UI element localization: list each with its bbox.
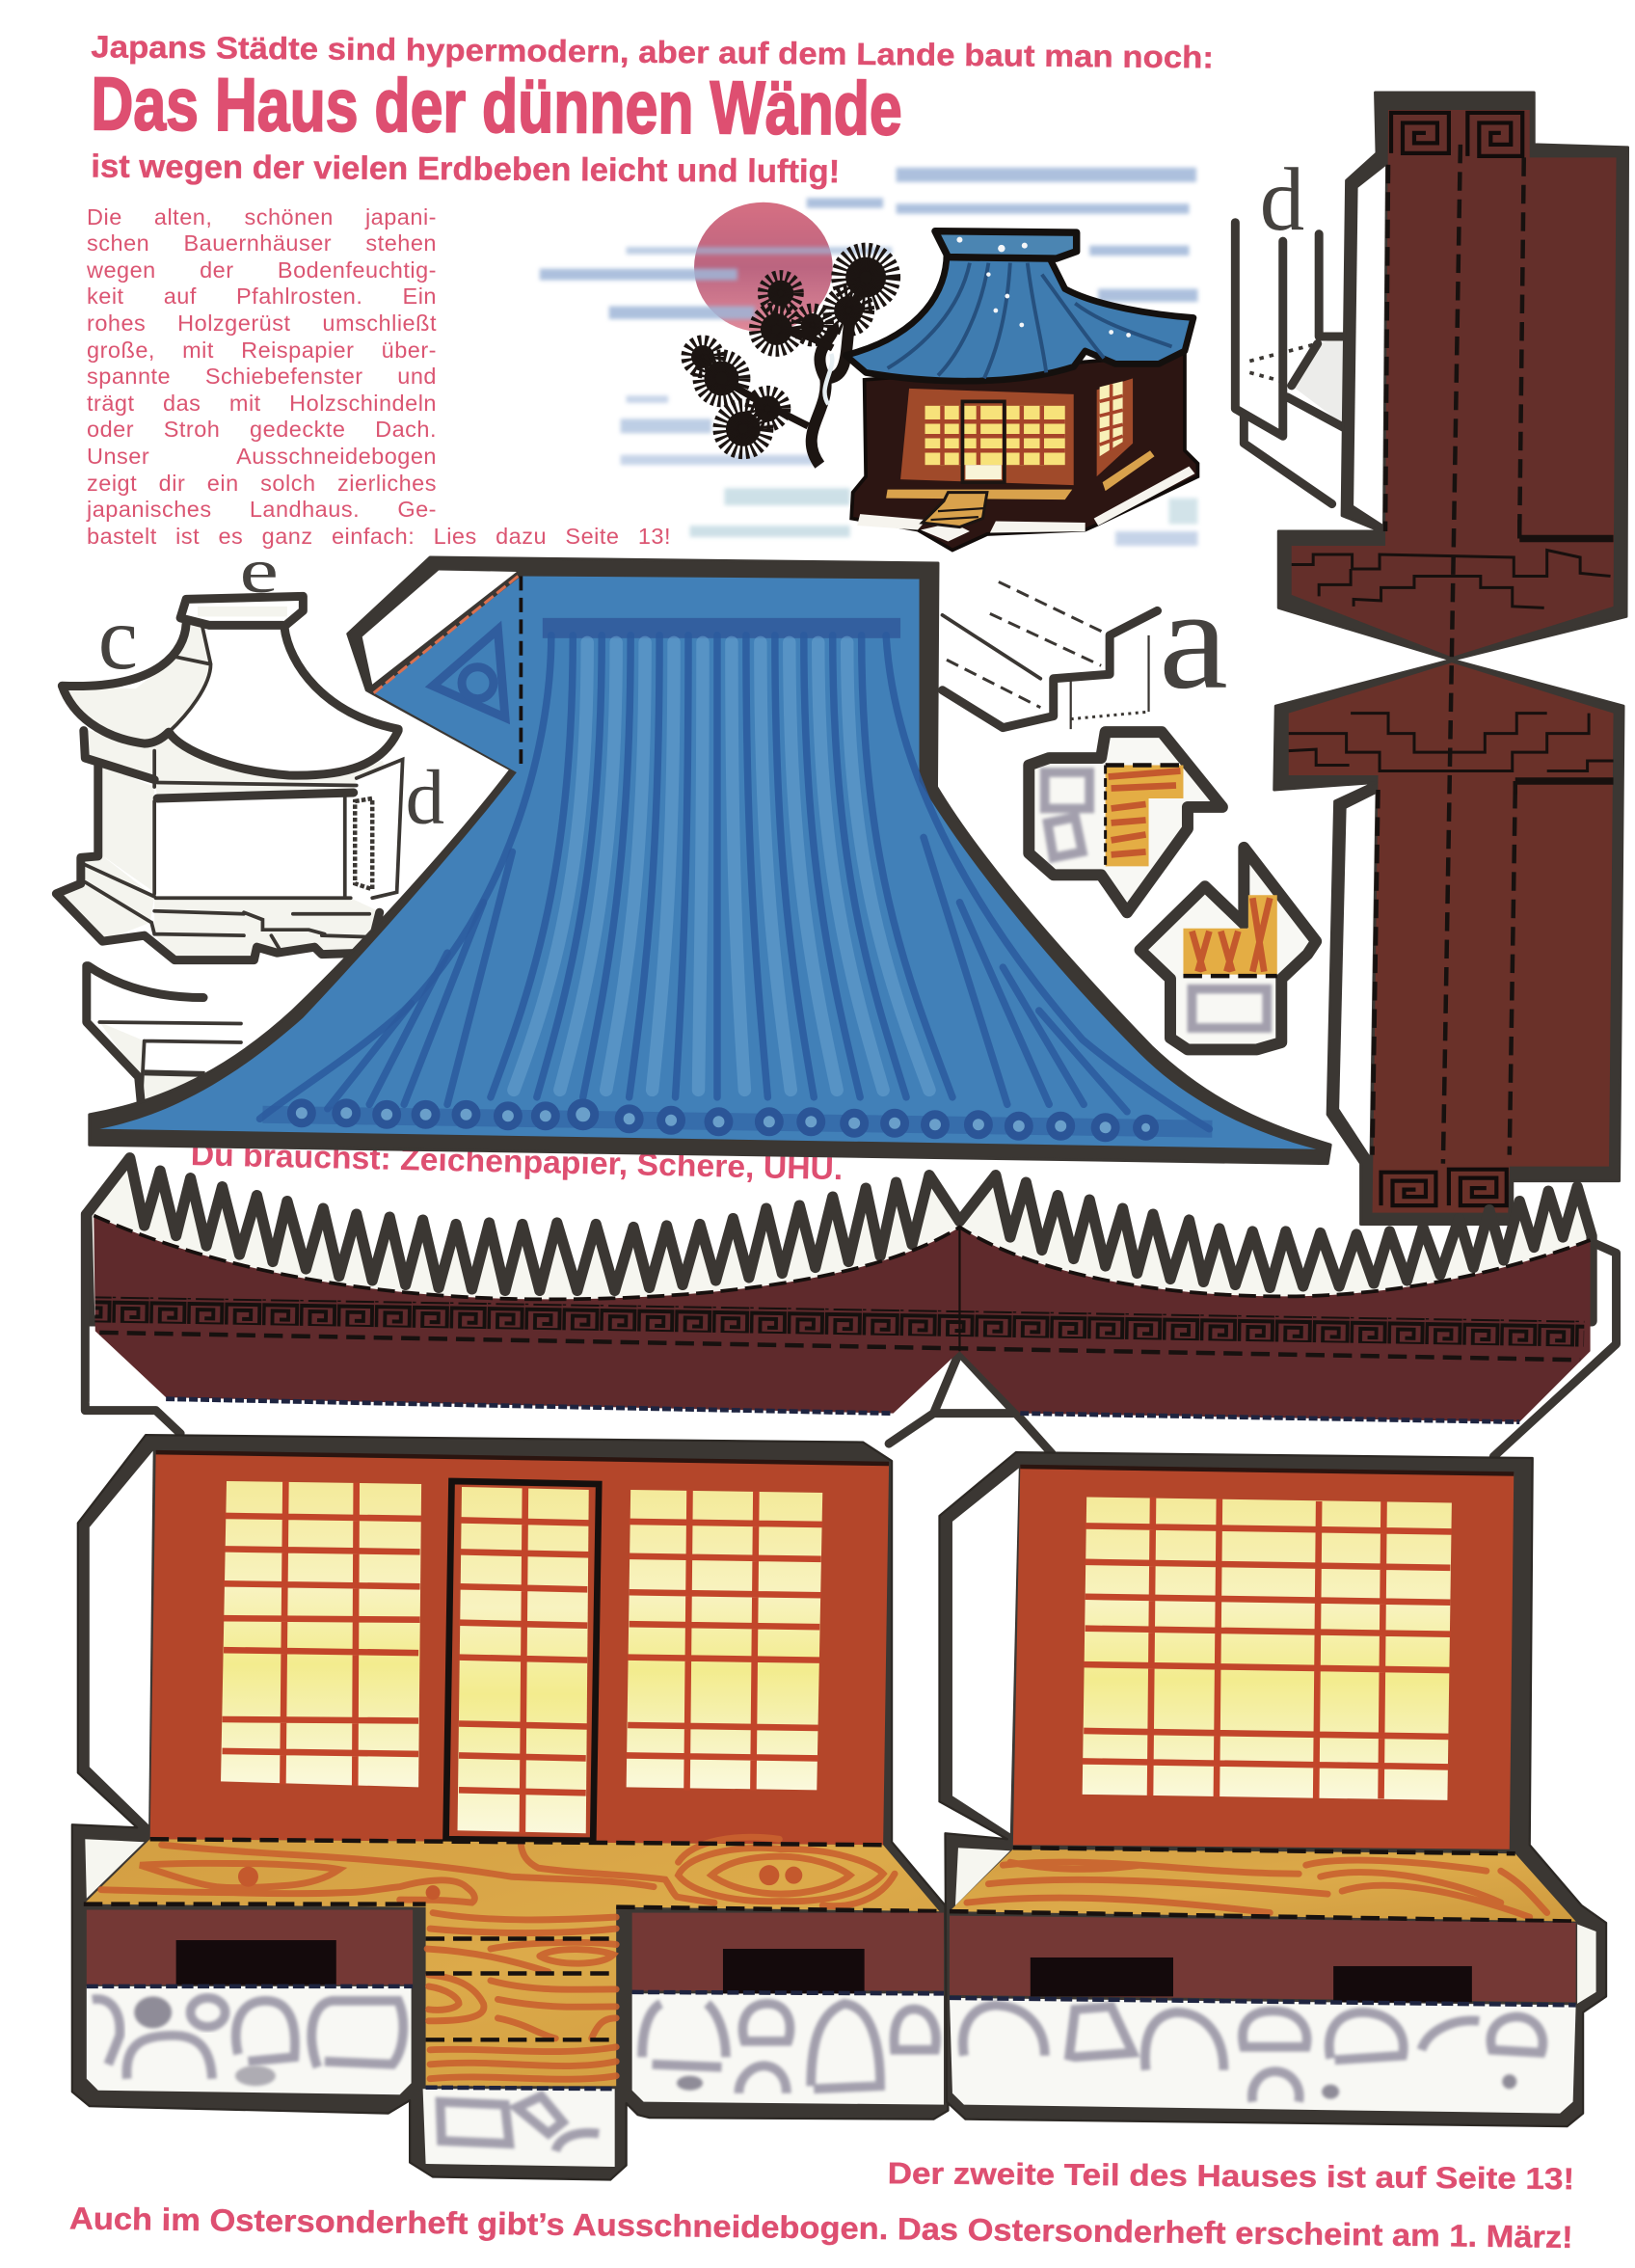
pine tree xyxy=(691,257,886,465)
front wall right window xyxy=(627,1490,822,1790)
part: side wall xyxy=(939,1452,1606,2126)
stones centre xyxy=(642,2004,936,2093)
front floor folds xyxy=(84,1839,939,2039)
text block: intro column: Unser Ausschneidebogen xyxy=(87,444,437,469)
assembly cream fills xyxy=(56,607,386,960)
house base snow xyxy=(857,467,1194,542)
text block: intro column: wegen der Bodenfeuchtig- xyxy=(87,257,437,283)
side floor tab xyxy=(955,1848,1010,1905)
fascia folds xyxy=(99,1333,1580,1360)
illustration: finished house with moon and pine xyxy=(540,168,1197,550)
opening left xyxy=(176,1940,336,1984)
text block: intro column: trägt das mit Holzschindeln xyxy=(87,391,437,416)
panel meander squares xyxy=(1381,113,1522,1205)
text block: intro column: Die alten, schönen japani- xyxy=(87,204,437,230)
brown lower wall centre xyxy=(632,1913,944,1990)
fold-line strips across base xyxy=(87,1986,1576,2089)
house side wall xyxy=(1097,378,1133,476)
front wall orange surface xyxy=(150,1452,889,1845)
roof tab edge xyxy=(374,576,518,693)
stairs stones xyxy=(1045,772,1089,857)
part: stairs tab one xyxy=(1029,732,1222,912)
stones tab xyxy=(441,2096,599,2151)
front stairs stone tab xyxy=(423,2089,615,2167)
fascia sawtooth glue tabs xyxy=(87,1158,1592,1321)
front wall side tab xyxy=(90,1451,153,1824)
clouds xyxy=(540,168,1197,546)
text block: intro column: zeigt dir ein solch zierliches xyxy=(87,471,437,496)
roof panel: blue main roof xyxy=(90,557,1330,1164)
fascia maroon surface xyxy=(94,1216,1591,1422)
roof tab white xyxy=(362,570,517,685)
roof stripes xyxy=(259,635,1209,1129)
roof outer cut shape xyxy=(90,557,1330,1164)
roof tile band xyxy=(262,1115,1212,1129)
label: c: c xyxy=(98,589,138,688)
stairs wood tread xyxy=(1106,766,1183,866)
panel tab lower xyxy=(1339,794,1376,1155)
side brown lower wall xyxy=(950,1916,1576,2002)
part: stairs tab two xyxy=(1140,848,1316,1049)
label: e: e xyxy=(239,536,279,607)
fascia outer cut lines xyxy=(85,1214,1617,1457)
text block: intro column: schen Bauernhäuser stehen xyxy=(87,230,437,256)
text block: intro column: rohes Holzgerüst umschließt xyxy=(87,310,437,336)
text block: intro column: spannte Schiebefenster und xyxy=(87,364,437,389)
front wall cut shape xyxy=(72,1435,948,2180)
side floor folds xyxy=(950,1848,1576,1922)
front wall left window xyxy=(221,1481,421,1787)
part: front wall xyxy=(72,1435,948,2180)
part: brown side wall panel xyxy=(1274,93,1628,1225)
panel tab upper xyxy=(1354,166,1385,525)
roof blue surface xyxy=(99,576,1316,1149)
stone lower wall left xyxy=(87,1986,412,2094)
tab wood xyxy=(1183,895,1277,975)
text block: intro column: keit auf Pfahlrosten. Ein xyxy=(87,284,437,309)
assembly diagram: part d top right xyxy=(1235,150,1344,504)
house front window xyxy=(925,401,1065,482)
assembly lower fragment xyxy=(87,966,241,1107)
house roof xyxy=(845,231,1193,381)
fascia side tab white xyxy=(90,1334,163,1403)
small line-drawn house (assembly diagram) xyxy=(56,596,403,1107)
footer: part two note: Der zweite Teil des Hauses ist auf Seite 13! xyxy=(888,2156,1574,2196)
side end tab xyxy=(1577,1925,1596,2004)
label: a: a xyxy=(1159,560,1228,719)
side openings xyxy=(1031,1958,1472,2002)
panel step ornaments xyxy=(1289,550,1614,771)
panel fold lines xyxy=(1373,145,1614,1164)
fascia meander frieze xyxy=(94,1296,1584,1347)
title: Das Haus der dünnen Wände xyxy=(91,63,902,150)
stones left xyxy=(93,1996,403,2086)
front wall door xyxy=(446,1481,599,1841)
side wall orange surface xyxy=(1013,1467,1514,1850)
side wall tab xyxy=(952,1469,1019,1833)
house steps xyxy=(923,493,987,527)
side wall window xyxy=(1083,1497,1452,1800)
brown lower wall left xyxy=(87,1910,413,1984)
house gold step xyxy=(886,450,1155,500)
roof tile circles xyxy=(291,1103,1155,1138)
assembly house walls xyxy=(56,731,403,960)
heading: top line: Japans Städte sind hypermodern, aber auf dem Lande baut man noch: xyxy=(91,29,1214,74)
roof fold xyxy=(520,576,523,766)
assembly house roof lines xyxy=(62,596,398,775)
side stone lower wall xyxy=(950,1998,1576,2114)
label: d right: d xyxy=(1260,150,1304,250)
footer: easter issue note: Auch im Ostersonderheft gibt’s Ausschneidebogen. Das Ostersonderheft erscheint am 1. März! xyxy=(69,2200,1573,2254)
house front wall xyxy=(900,389,1074,485)
text block: intro column: große, mit Reispapier über- xyxy=(87,338,437,363)
panel brown upper xyxy=(1292,110,1617,657)
panel outer cut shape xyxy=(1274,93,1628,1225)
text block: intro column: oder Stroh gedeckte Dach. xyxy=(87,417,437,442)
moon xyxy=(694,202,833,332)
part: roof fascia band xyxy=(85,1158,1617,1457)
text block: intro column xyxy=(86,204,671,549)
front floor side tab xyxy=(85,1839,145,1899)
fascia edge highlight xyxy=(94,1216,1591,1299)
assembly diagram: part a xyxy=(942,560,1228,729)
house body xyxy=(851,354,1197,550)
front floor wood xyxy=(84,1837,939,2086)
opening centre xyxy=(723,1949,865,1993)
roof triangle emblem xyxy=(433,630,505,717)
text block: intro column: japanisches Landhaus. Ge- xyxy=(87,497,437,522)
heading: subtitle: ist wegen der vielen Erdbeben leicht und luftig! xyxy=(91,149,840,190)
side stones xyxy=(963,2005,1542,2102)
side wall cut shape xyxy=(939,1452,1606,2126)
panel brown lower xyxy=(1289,662,1614,1213)
roof top bar xyxy=(543,618,900,638)
stone lower wall centre xyxy=(632,1993,944,2105)
label: d left: d xyxy=(406,754,444,840)
tab stones xyxy=(1192,989,1267,1028)
text block: intro column: bastelt ist es ganz einfach: Lies dazu Seite 13! xyxy=(87,524,671,549)
instruction: materials: Du brauchst: Zeichenpapier, Schere, UHU. xyxy=(190,1136,844,1186)
side floor wood xyxy=(950,1850,1576,1922)
